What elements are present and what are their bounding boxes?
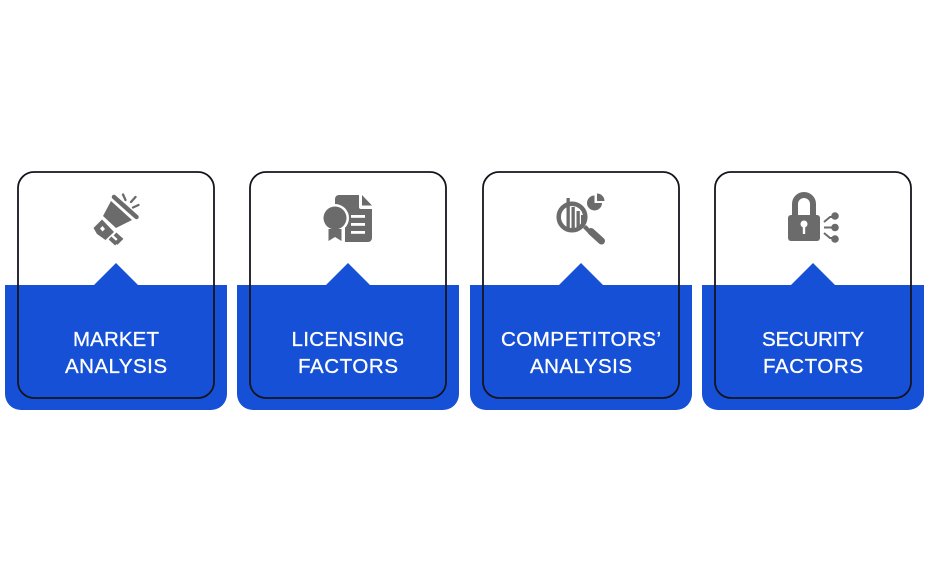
icon: magnifier with chart: [559, 194, 604, 241]
card: licensing factors: [237, 172, 459, 410]
card: market analysis: ANALYSIS: [65, 355, 167, 378]
blue panel: [702, 263, 924, 410]
outline frame: [483, 172, 679, 398]
card: licensing factors: FACTORS: [298, 355, 398, 378]
card: security factors: [702, 172, 924, 410]
card: competitors analysis: ANALYSIS: [530, 355, 632, 378]
card: competitors analysis: [470, 172, 692, 410]
outline frame: [250, 172, 446, 398]
blue panel: [5, 263, 227, 410]
outline frame: [715, 172, 911, 398]
icon: certificate document: [321, 195, 372, 244]
outline frame: [18, 172, 214, 398]
blue panel: [237, 263, 459, 410]
label: SECURITY: [762, 328, 864, 351]
card: market analysis: [5, 172, 227, 410]
card: security factors: FACTORS: [763, 355, 863, 378]
label: LICENSING: [292, 328, 404, 351]
label: COMPETITORS’: [501, 328, 661, 351]
icon: megaphone: [94, 194, 138, 244]
icon: padlock with nodes: [788, 195, 839, 243]
label: MARKET: [73, 328, 159, 351]
blue panel: [470, 263, 692, 410]
